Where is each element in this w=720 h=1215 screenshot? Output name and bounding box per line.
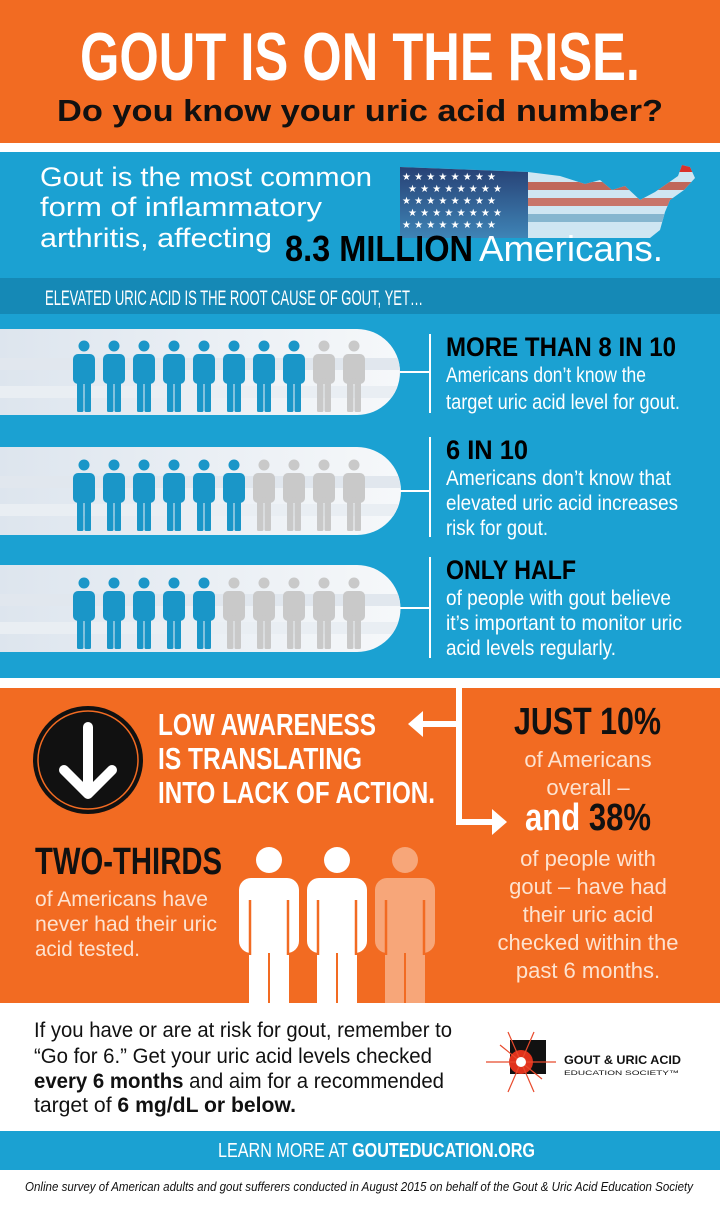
icon: US flag map: ★ ★ ★ ★ ★ ★ ★ ★ [408,184,502,195]
low awareness heading: IS TRANSLATING [158,741,362,776]
panel: blue statistics: Americans. [479,228,663,269]
header band [0,0,720,143]
subtitle: Do you know your uric acid number? [57,93,663,128]
stat row 3: acid levels regularly. [446,637,616,660]
just 10% stat: gout – have had [509,874,667,899]
just 10% stat: of people with [520,846,656,871]
just 10% stat: and 38% [525,797,651,839]
stat row 1: Americans don’t know the [446,364,646,387]
stat row 1: MORE THAN 8 IN 10 [446,332,676,362]
stat row 3: ONLY HALF [446,555,576,585]
stat row 3 [0,555,682,660]
logo: GOUT & URIC ACID [564,1053,681,1067]
call to action text: target of 6 mg/dL or below. [34,1094,295,1117]
intro text: form of inflammatory [40,192,323,222]
icon: US flag map: ★ ★ ★ ★ ★ ★ ★ ★ [402,220,496,231]
just 10% stat: their uric acid [523,902,653,927]
arrow connector [420,678,492,822]
stat row 3: of people with gout believe [446,587,671,610]
intro text: arthritis, affecting [40,223,272,253]
stat row 2: Americans don’t know that [446,467,671,490]
icon: US flag map [400,165,695,238]
learn more bar: LEARN MORE AT GOUTEDUCATION.ORG [218,1140,535,1162]
just 10% stat: checked within the [498,930,678,955]
just 10% stat: of Americans [524,747,652,772]
call to action text: If you have or are at risk for gout, remember to [34,1019,452,1042]
just 10% stat [498,701,678,983]
strip heading [0,278,720,314]
just 10% stat: overall – [546,775,630,800]
stat row 3: it’s important to monitor uric [446,612,682,635]
stat row 1 [0,329,680,415]
panel: blue statistics [0,152,720,678]
call to action text: “Go for 6.” Get your uric acid levels checked [34,1045,432,1068]
stat row 2: 6 IN 10 [446,435,528,465]
stat row 2: risk for gout. [446,517,548,540]
stat row 2 [0,435,678,540]
two-thirds stat: never had their uric [35,913,217,936]
icon: three people [239,847,435,1007]
panel: orange action [0,678,720,1007]
learn more bar [0,1131,720,1170]
low awareness heading: LOW AWARENESS [158,707,376,742]
icon: down arrow circle [33,706,143,814]
strip heading: ELEVATED URIC ACID IS THE ROOT CAUSE OF GOUT, YET… [45,287,423,310]
stat row 1: target uric acid level for gout. [446,391,680,414]
two-thirds stat: of Americans have [35,888,208,911]
stat row 2: elevated uric acid increases [446,492,678,515]
icon: US flag map: ★ ★ ★ ★ ★ ★ ★ ★ [408,208,502,219]
call to action text: every 6 months and aim for a recommended [34,1070,452,1093]
two-thirds stat: acid tested. [35,938,140,961]
just 10% stat: JUST 10% [514,701,661,743]
logo [486,1032,681,1092]
two-thirds stat: TWO-THIRDS [35,841,222,883]
icon: US flag map: ★ ★ ★ ★ ★ ★ ★ ★ [402,196,496,207]
highlight number: 8.3 MILLION [285,228,473,269]
two-thirds stat [35,841,222,961]
just 10% stat: past 6 months. [516,958,660,983]
arrowheads [408,711,507,835]
logo: EDUCATION SOCIETY™ [564,1070,679,1077]
intro text: Gout is the most common [40,162,372,192]
low awareness heading: INTO LACK OF ACTION. [158,775,435,810]
icon: US flag map: ★ ★ ★ ★ ★ ★ ★ ★ [402,172,496,183]
